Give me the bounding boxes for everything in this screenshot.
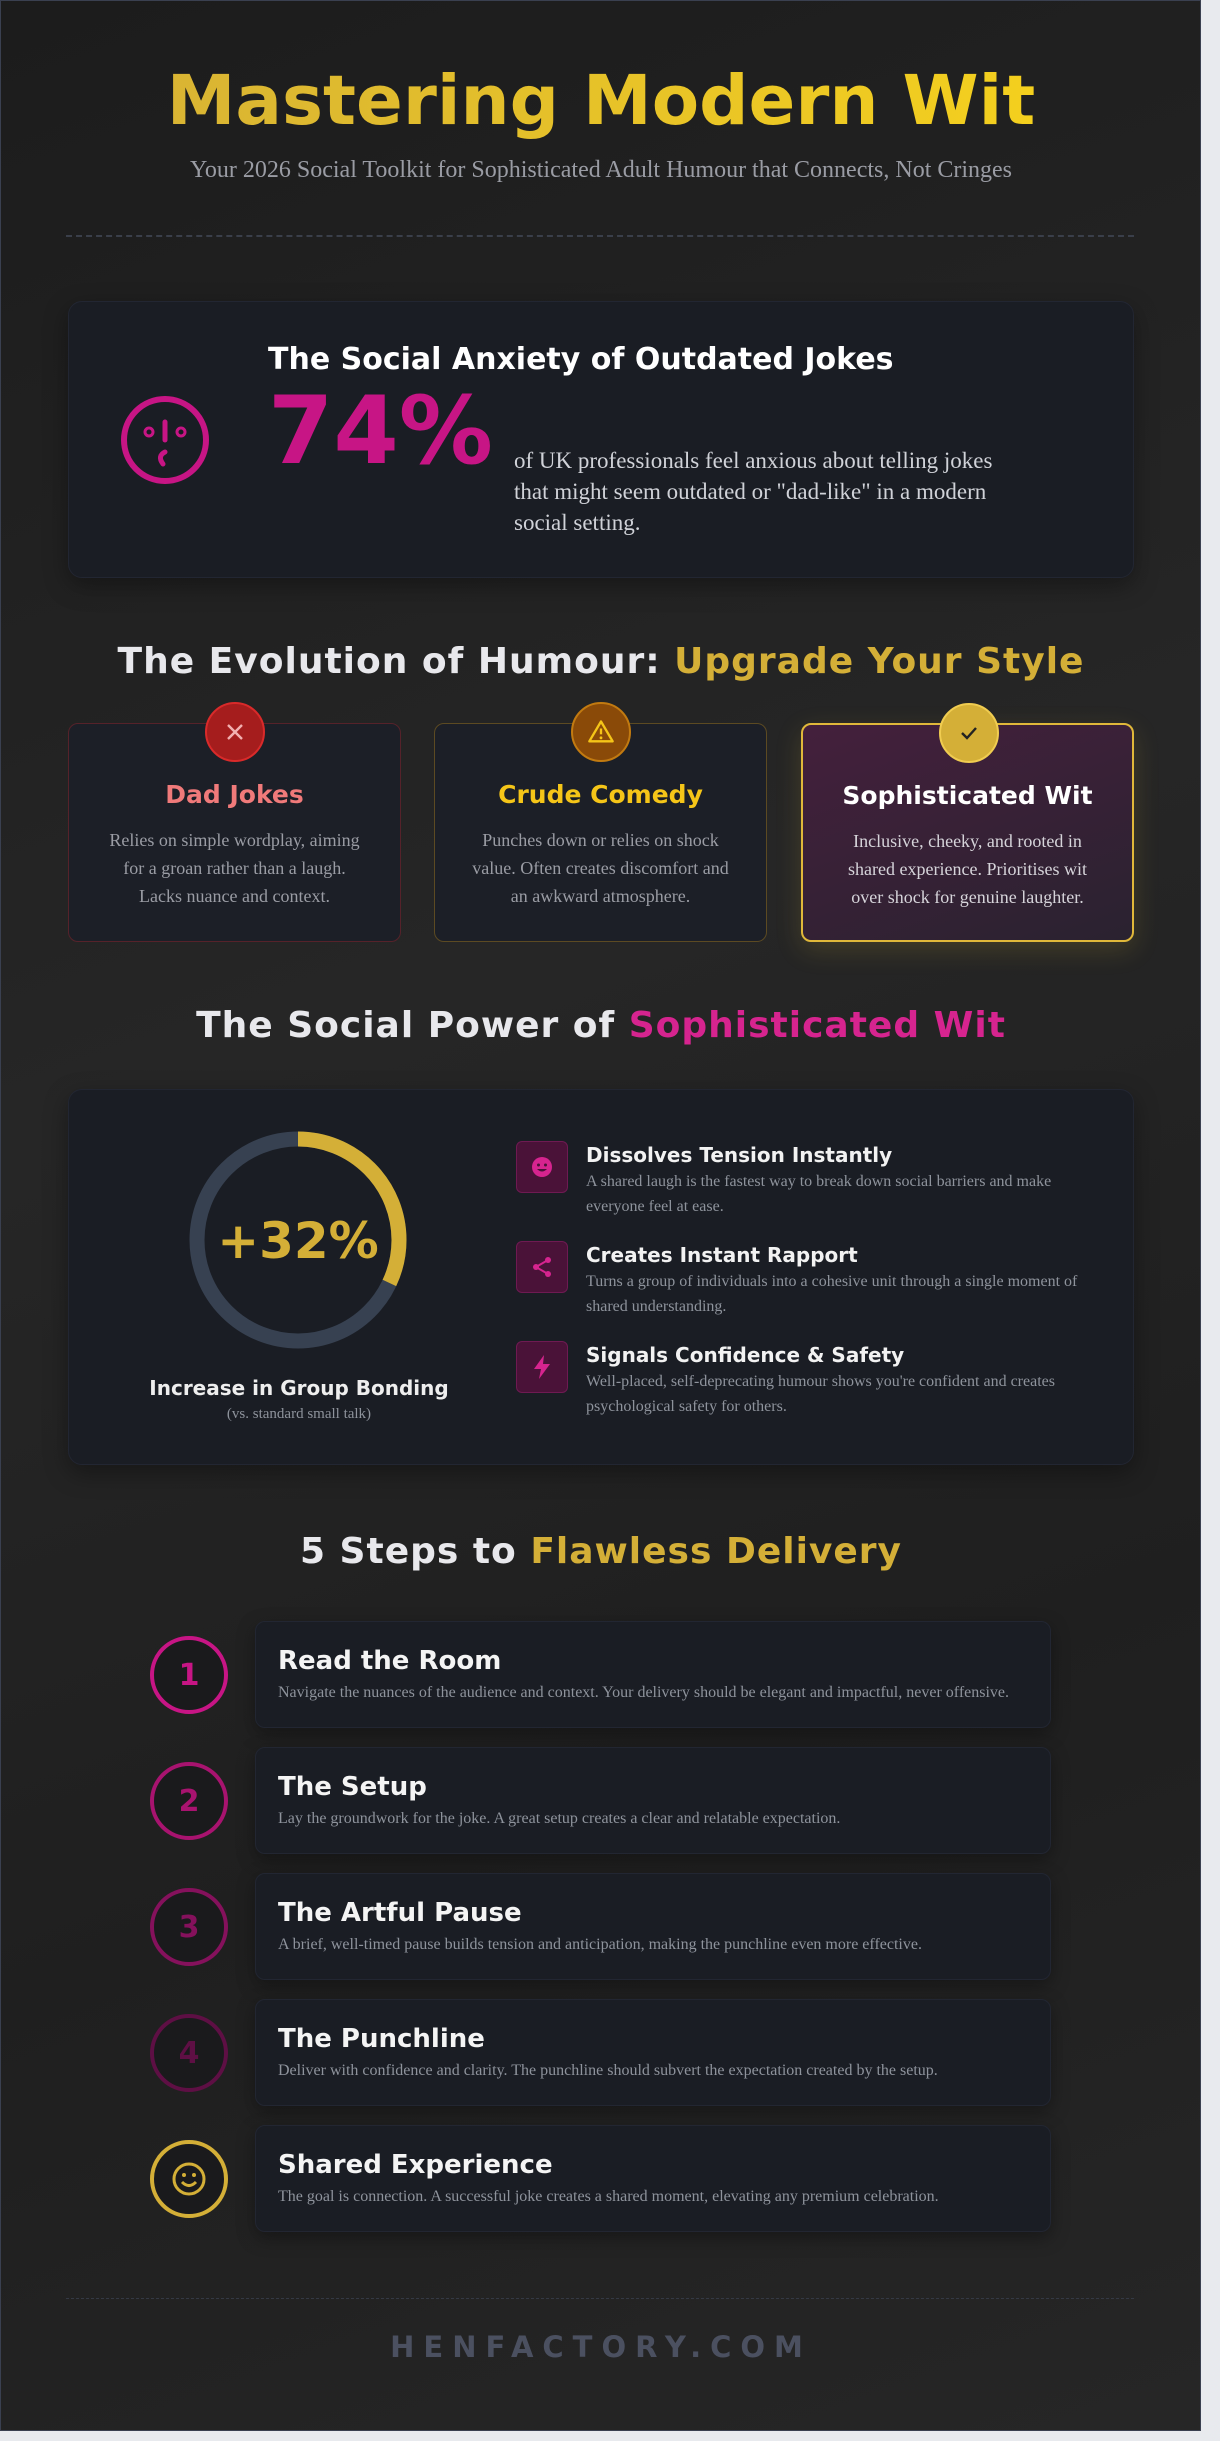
step 4: The Punchline: [278, 2024, 485, 2054]
card: sophisticated wit: Sophisticated Wit: [842, 781, 1093, 810]
step 2: Lay the groundwork for the joke. A great setup creates a clear and relatable expectation.: [278, 1810, 840, 1827]
title: Mastering Modern Wit: [167, 61, 1035, 141]
card: dad jokes: Relies on simple wordplay, aiming for a groan rather than a laugh. Lacks nuance and context.: [109, 830, 360, 906]
icon: worried face: [121, 396, 209, 484]
card: crude comedy: [434, 723, 767, 942]
step 2: The Setup: [278, 1772, 427, 1802]
item: confidence: [516, 1341, 1055, 1415]
step 1: Navigate the nuances of the audience and context. Your delivery should be elegant and impactful, never offensive.: [278, 1684, 1009, 1701]
text: Well-placed, self-deprecating humour shows you're confident and creates psychological safety for others.: [586, 1373, 1055, 1415]
text: Creates Instant Rapport: [586, 1243, 858, 1267]
step 4: Deliver with confidence and clarity. The punchline should subvert the expectation created by the setup.: [278, 2062, 938, 2079]
text: Signals Confidence & Safety: [586, 1343, 904, 1367]
step 1: Read the Room: [278, 1646, 501, 1676]
card: dad jokes: [68, 723, 401, 942]
step 5: Shared Experience: [278, 2150, 553, 2180]
icon: check: [939, 703, 999, 763]
step 3: A brief, well-timed pause builds tension and anticipation, making the punchline even more effective.: [278, 1936, 922, 1953]
text: A shared laugh is the fastest way to break down social barriers and make everyone feel at ease.: [586, 1173, 1051, 1215]
card: crude comedy: Punches down or relies on shock value. Often creates discomfort and an awkward atmosphere.: [472, 830, 729, 906]
item: dissolves tension: [516, 1141, 1051, 1215]
heading: evolution: The Evolution of Humour: Upgrade Your Style: [118, 641, 1084, 682]
subtitle: Your 2026 Social Toolkit for Sophisticated Adult Humour that Connects, Not Cringes: [190, 157, 1012, 183]
card: crude comedy: Crude Comedy: [498, 780, 703, 809]
step 1: 1: [179, 1658, 199, 1692]
panel: social power: [68, 1089, 1134, 1465]
ring label: (vs. standard small talk): [227, 1406, 371, 1422]
card: dad jokes: Dad Jokes: [165, 780, 304, 809]
step 2: 2: [179, 1784, 199, 1818]
text: Turns a group of individuals into a cohesive unit through a single moment of shared understanding.: [586, 1273, 1077, 1315]
step 4: 4: [179, 2036, 199, 2070]
stat text: of UK professionals feel anxious about telling jokes that might seem outdated or "dad-like" in a modern social setting.: [514, 448, 992, 535]
step 5: The goal is connection. A successful joke creates a shared moment, elevating any premium celebration.: [278, 2188, 939, 2205]
step 3: 3: [179, 1910, 199, 1944]
item: rapport: [516, 1241, 1078, 1315]
ring chart: [190, 1132, 406, 1348]
card: sophisticated wit: Inclusive, cheeky, and rooted in shared experience. Prioritises wit over shock for genuine laughter.: [848, 831, 1087, 907]
step 3: [150, 1873, 1051, 1982]
ring label: Increase in Group Bonding: [149, 1376, 449, 1400]
step 4: [150, 1999, 1051, 2108]
step 5: [150, 2125, 1051, 2235]
heading: social power: The Social Power of Sophisticated Wit: [196, 1005, 1006, 1046]
icon: x: [205, 702, 265, 762]
panel: anxiety stat: [68, 301, 1134, 578]
big stat: 74%: [268, 377, 493, 486]
ring chart: +32%: [217, 1212, 379, 1270]
heading: steps: 5 Steps to Flawless Delivery: [300, 1531, 902, 1572]
card: sophisticated wit: [801, 723, 1134, 942]
step 1: [150, 1621, 1051, 1729]
text: Dissolves Tension Instantly: [586, 1143, 892, 1167]
heading: The Social Anxiety of Outdated Jokes: [268, 342, 894, 377]
step 2: [150, 1747, 1051, 1855]
step 3: The Artful Pause: [278, 1898, 522, 1928]
icon: warning: [571, 702, 631, 762]
footer: HENFACTORY.COM: [390, 2330, 812, 2364]
ring label: [149, 1376, 449, 1422]
